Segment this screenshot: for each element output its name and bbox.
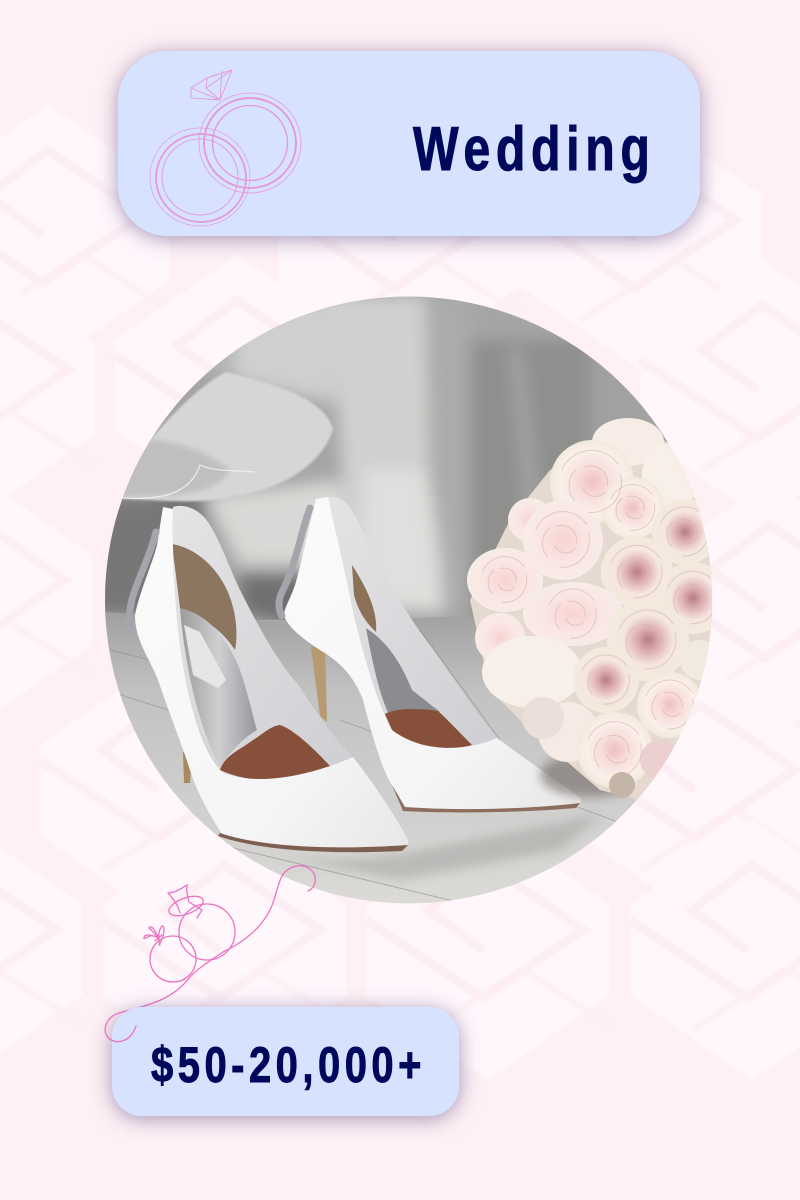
- jewelled heel trim, left shoe: [129, 532, 156, 632]
- title panel background: [118, 51, 700, 236]
- jewelled heel trim, right shoe: [279, 508, 310, 616]
- title panel: [118, 51, 700, 236]
- dress ruffle: [120, 372, 333, 501]
- doodle tail over price panel: [105, 1012, 136, 1042]
- left shoe: [129, 506, 408, 852]
- doodle: ring line drawing: [123, 866, 315, 1012]
- price label: $50-20,000+: [151, 1037, 426, 1093]
- photo backdrop: dress: [90, 290, 720, 622]
- wooden floor: [100, 600, 720, 910]
- photo: wedding shoes and rose bouquet: [90, 290, 729, 910]
- title: Wedding: Wedding: [413, 114, 656, 183]
- right shoe: [279, 497, 581, 812]
- price panel background: [112, 1007, 459, 1116]
- icon: wedding rings with diamond: [150, 70, 301, 226]
- rose bouquet: [467, 418, 729, 800]
- price panel: [112, 1007, 459, 1116]
